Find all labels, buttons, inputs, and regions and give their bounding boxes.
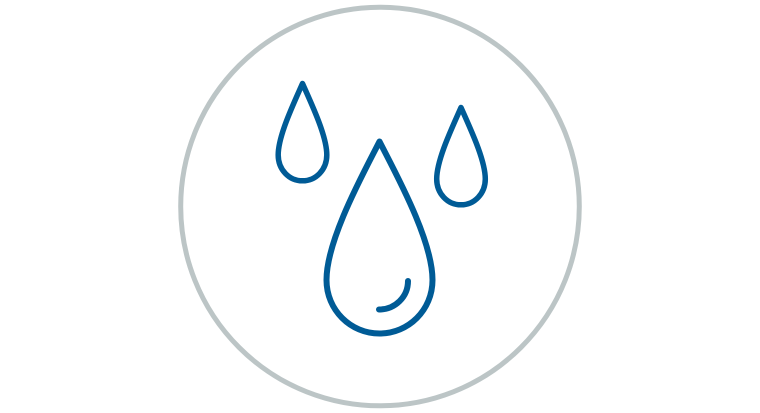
icon: large centre drop	[326, 142, 432, 334]
circle outline	[181, 7, 579, 406]
icon: water drops	[278, 84, 485, 334]
icon: small left drop	[278, 84, 327, 181]
icon: small right drop	[437, 108, 485, 205]
icon: drop highlight	[379, 281, 408, 310]
